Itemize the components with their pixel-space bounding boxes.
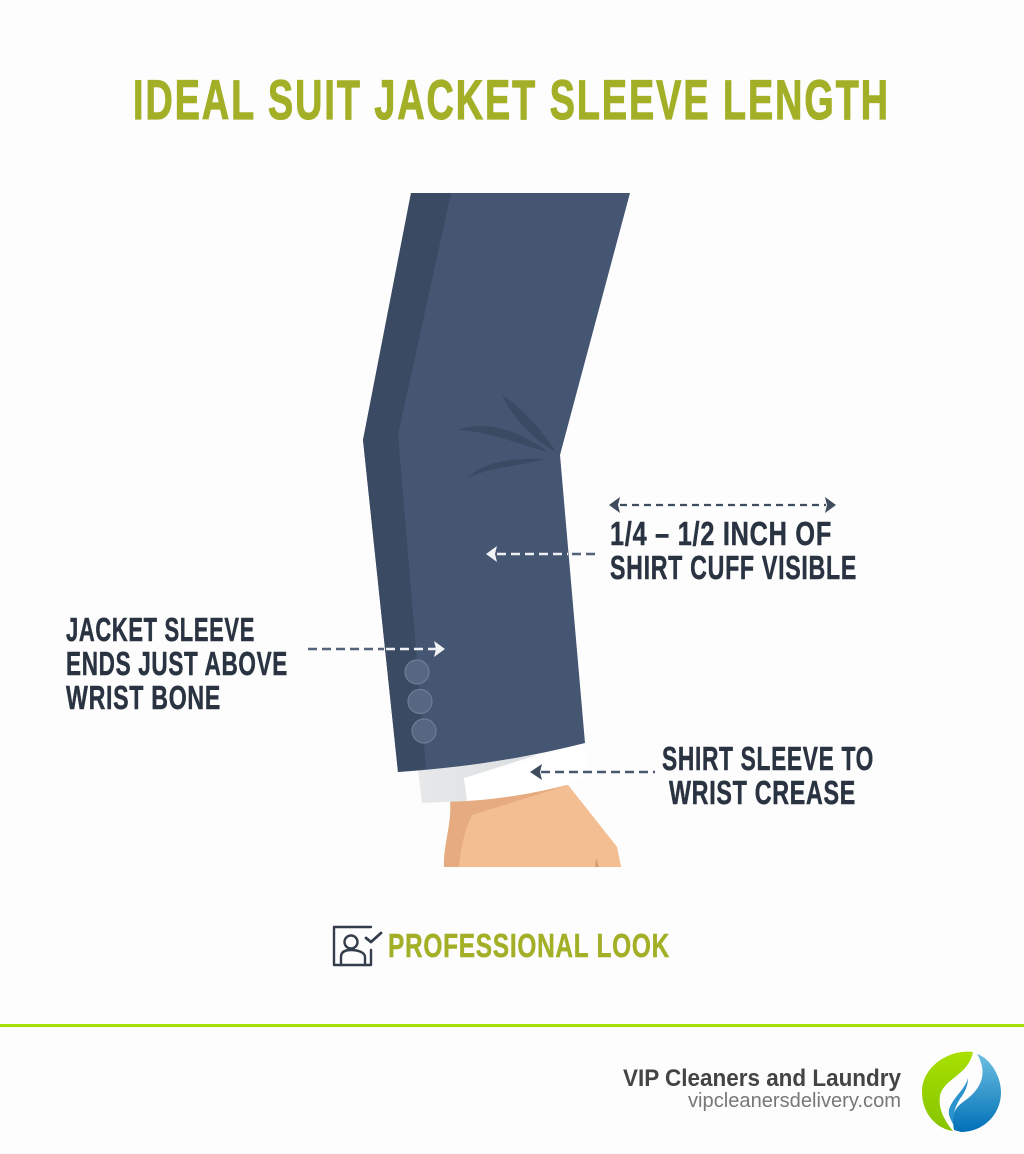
sleeve shaded seam xyxy=(363,193,451,772)
label: jacket sleeve ends: WRIST BONE xyxy=(66,679,221,716)
label: shirt cuff visible xyxy=(610,515,857,586)
label: jacket sleeve ends xyxy=(66,611,288,716)
jacket sleeve xyxy=(363,193,630,772)
icon: professional person with check xyxy=(334,927,381,965)
label: professional look: PROFESSIONAL LOOK xyxy=(388,927,670,964)
label: jacket sleeve ends: ENDS JUST ABOVE xyxy=(66,645,288,682)
illustration: arm with jacket sleeve xyxy=(363,193,630,867)
label: shirt cuff visible: 1/4 – 1/2 INCH OF xyxy=(610,515,832,552)
label: shirt cuff visible: SHIRT CUFF VISIBLE xyxy=(610,549,857,586)
footer divider xyxy=(0,1024,1024,1027)
label: shirt sleeve to wrist crease: SHIRT SLEEVE TO xyxy=(662,740,874,777)
arrow: pointing to shirt sleeve xyxy=(530,764,655,780)
label: shirt sleeve to wrist crease: WRIST CREASE xyxy=(669,774,856,811)
arrow: pointing to sleeve end xyxy=(308,641,445,657)
label: jacket sleeve ends: JACKET SLEEVE xyxy=(66,611,255,648)
logo xyxy=(922,1052,1001,1132)
arrow: pointing into sleeve from right xyxy=(486,546,600,562)
footer brand text xyxy=(623,1065,902,1112)
footer brand text: VIP Cleaners and Laundry xyxy=(623,1065,902,1092)
label: shirt sleeve to wrist crease xyxy=(662,740,874,811)
shirt cuff xyxy=(418,743,586,803)
sleeve buttons xyxy=(405,660,436,743)
footer brand text: vipcleanersdelivery.com xyxy=(688,1090,901,1112)
elbow creases xyxy=(457,395,556,478)
arrow: width of shirt cuff xyxy=(609,497,836,513)
hand xyxy=(444,785,621,867)
